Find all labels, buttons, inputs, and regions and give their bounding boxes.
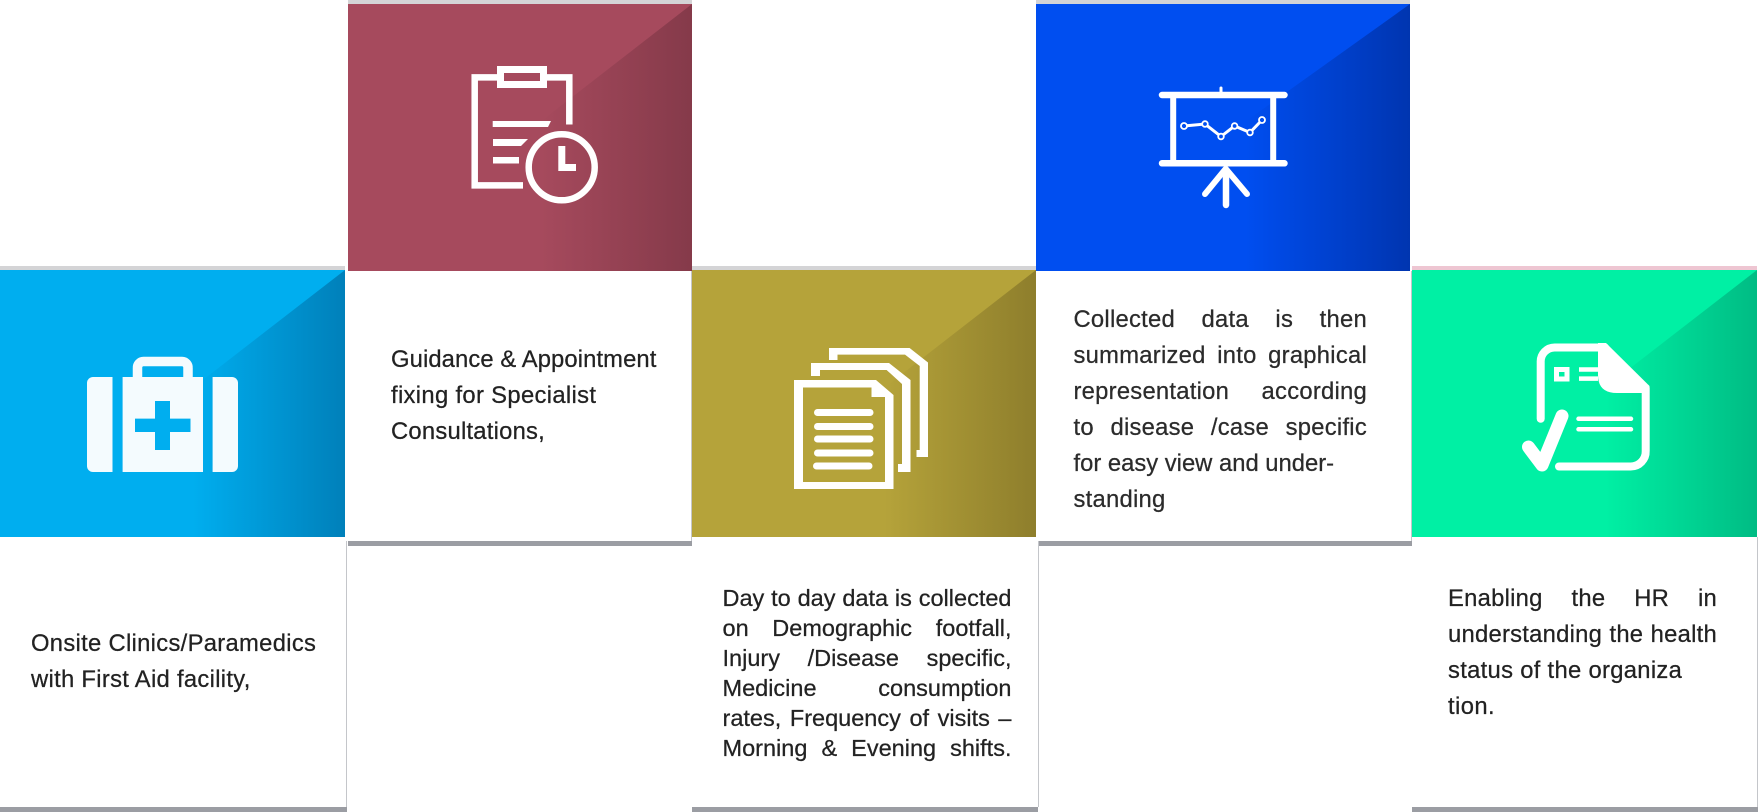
panel: daily data collection (692, 266, 1039, 812)
text: HR health status description: tion. (1448, 693, 1495, 720)
text: graphical summary description: standing (1074, 486, 1165, 513)
panel: graphical summary (1036, 0, 1412, 546)
icon: document with check mark (1522, 343, 1650, 472)
text: data collection description: on Demographic footfall, (722, 615, 1012, 641)
text: data collection description: rates, Frequency of visits – (722, 705, 1012, 731)
text: data collection description: Injury /Disease specific, (722, 645, 1012, 671)
text: guidance description: Guidance & Appointment (391, 346, 656, 373)
icon: clipboard with clock (471, 66, 598, 204)
panel: guidance and appointment (346, 0, 692, 546)
text: graphical summary description: for easy view and under- (1074, 450, 1334, 477)
panel: HR health status (1412, 266, 1758, 812)
text: graphical summary description: Collected data is then (1074, 306, 1367, 333)
text: data collection description (722, 585, 1012, 762)
text: guidance description (391, 346, 656, 445)
text: graphical summary description: summarized into graphical (1074, 342, 1367, 369)
panel: onsite clinics (0, 266, 347, 812)
text: onsite clinics description: Onsite Clinics/Paramedics (31, 630, 316, 657)
text: data collection description: Morning & Evening shifts. (722, 735, 1012, 761)
text: HR health status description: status of the organiza (1448, 657, 1682, 684)
icon: first aid kit (87, 356, 238, 472)
icon: stacked documents (794, 348, 928, 489)
text: graphical summary description: to disease /case specific (1074, 414, 1367, 441)
text: onsite clinics description: with First Aid facility, (31, 666, 251, 693)
text: graphical summary description: representation according (1074, 378, 1367, 405)
text: guidance description: Consultations, (391, 418, 545, 445)
text: HR health status description: Enabling the HR in (1448, 585, 1717, 612)
text: graphical summary description (1074, 306, 1367, 513)
text: guidance description: fixing for Specialist (391, 382, 596, 409)
icon: presentation board with chart (1158, 86, 1288, 208)
text: data collection description: Day to day data is collected (722, 585, 1012, 611)
text: onsite clinics description (30, 630, 316, 693)
text: HR health status description: understanding the health (1448, 621, 1717, 648)
text: data collection description: Medicine consumption (722, 675, 1012, 701)
text: HR health status description (1448, 585, 1717, 720)
